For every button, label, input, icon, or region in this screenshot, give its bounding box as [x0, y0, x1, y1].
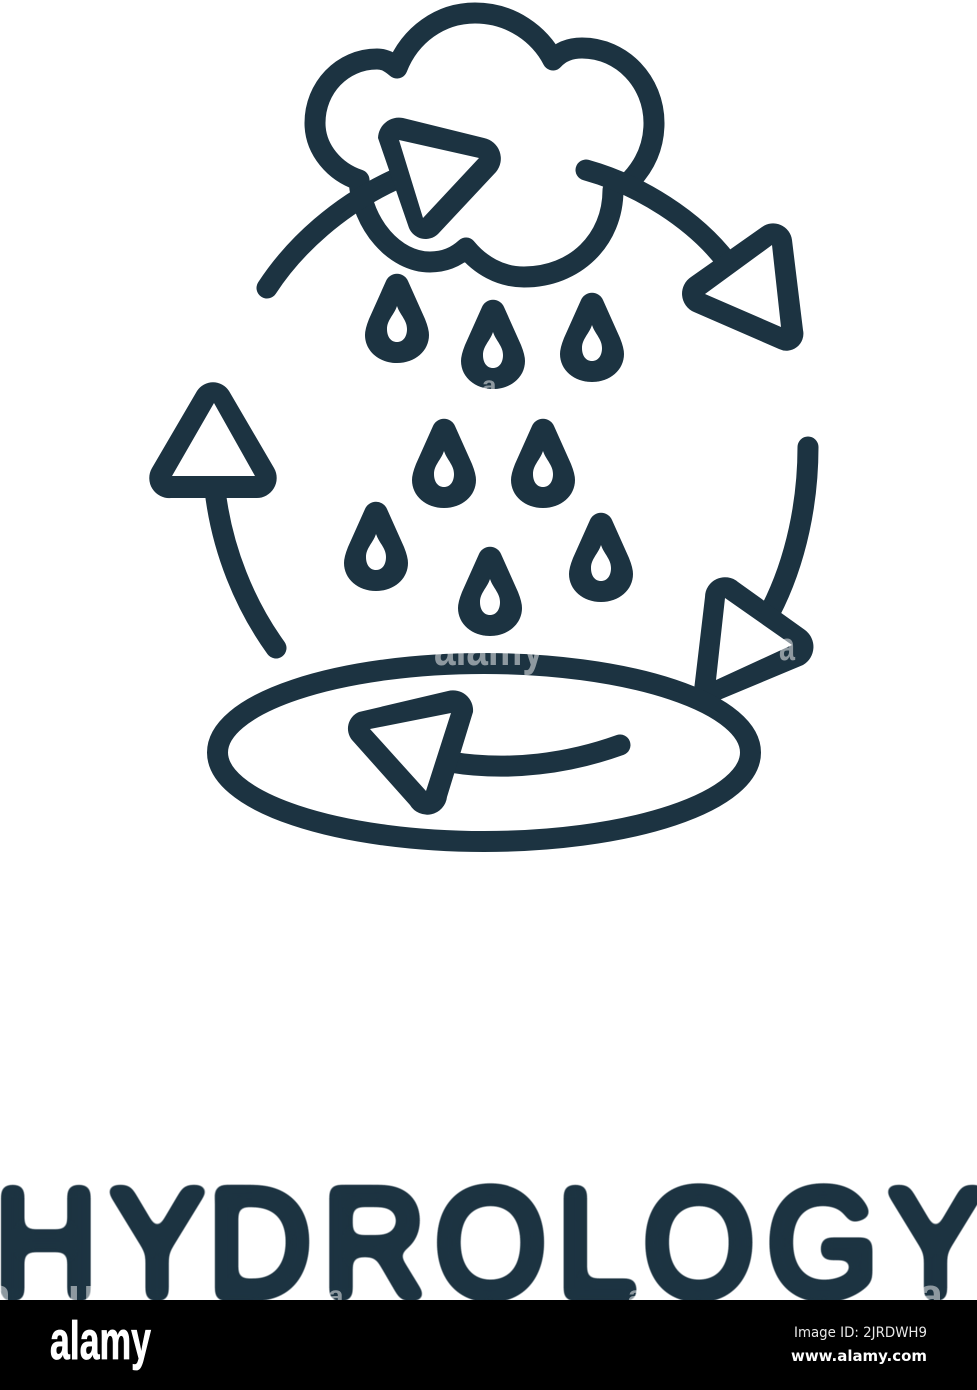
- watermark fragments: u: [68, 1269, 96, 1320]
- arrow: top left arc: [267, 180, 394, 288]
- arrow head: right triangle: [694, 577, 813, 703]
- lake ellipse: [218, 664, 750, 842]
- watermark fragments: a: [328, 1280, 344, 1311]
- website: www.alamy.com: [791, 1347, 927, 1365]
- footer bar: [0, 1300, 977, 1390]
- arrow: top right arc: [586, 170, 727, 262]
- arrow head: lake triangle: [348, 690, 473, 815]
- rain drops: [344, 274, 633, 636]
- watermark fragments: a: [918, 1269, 944, 1320]
- watermark fragments: a: [482, 370, 497, 400]
- arrow head: left triangle: [149, 382, 277, 498]
- arrow: lake arc: [450, 745, 620, 766]
- icon: cloud: [315, 13, 654, 277]
- arrow head: top right triangle: [682, 223, 803, 351]
- icon: water cycle: [149, 13, 813, 842]
- watermark fragments: alamy: [434, 623, 544, 676]
- logo: alamy: alamy: [50, 1311, 151, 1371]
- watermark fragments: a: [779, 625, 796, 669]
- arrow head: cloud triangle: [378, 118, 501, 239]
- watermark fragments: a: [628, 1280, 644, 1311]
- watermark fragments: [0, 370, 944, 1320]
- arrow: right arc: [770, 447, 808, 612]
- image id: Image ID: 2JRDWH9: [794, 1325, 927, 1341]
- arrow: left arc: [215, 490, 276, 648]
- title: HYDROLOGY: [0, 1158, 977, 1329]
